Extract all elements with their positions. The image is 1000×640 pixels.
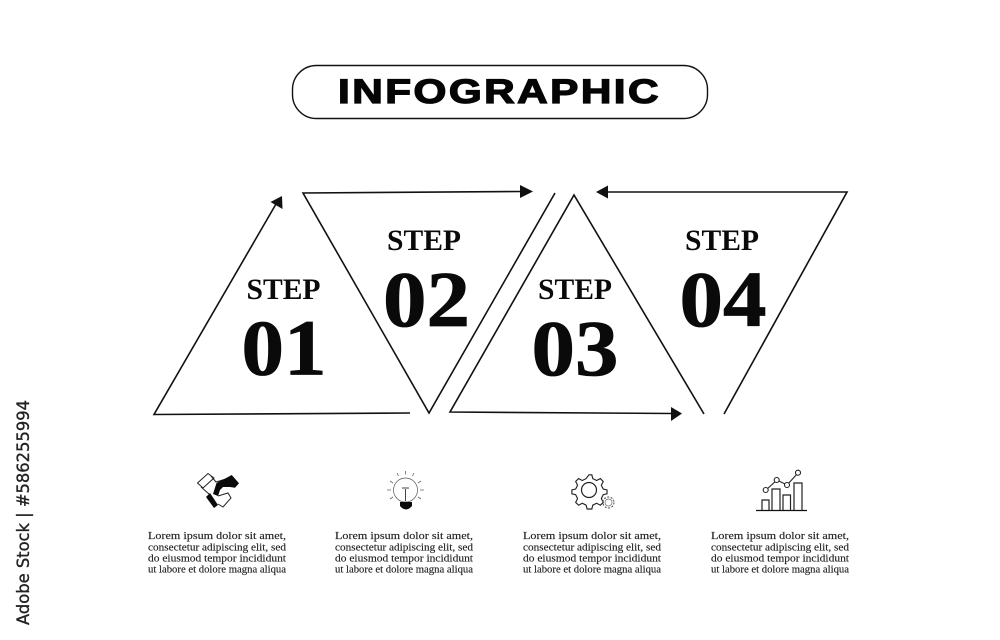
text block 4: ut labore et dolore magna aliqua xyxy=(711,564,849,576)
text block 4: do eiusmod tempor incididunt xyxy=(711,552,849,564)
stock id vertical text: Adobe Stock | #586255994 xyxy=(14,400,34,625)
icon: bar chart xyxy=(756,470,807,510)
step 01 label: STEP xyxy=(246,273,320,306)
step 04 label: STEP xyxy=(685,224,759,257)
step 03 triangle arrow xyxy=(450,195,704,421)
title text: INFOGRAPHIC xyxy=(338,73,661,111)
step 02 label: STEP xyxy=(387,224,461,257)
text block 4 xyxy=(711,530,850,576)
text block 2: do eiusmod tempor incididunt xyxy=(335,552,473,564)
text block 3: do eiusmod tempor incididunt xyxy=(523,552,661,564)
text block 2 xyxy=(335,530,474,576)
step 02 label: 02 xyxy=(383,257,470,344)
step 01 label: 01 xyxy=(242,306,326,392)
step 02 triangle arrow xyxy=(303,185,555,413)
step 04 triangle arrow xyxy=(596,186,847,414)
text block 3 xyxy=(523,530,662,576)
text block 1: ut labore et dolore magna aliqua xyxy=(148,564,286,576)
text block 3: consectetur adipiscing elit, sed xyxy=(523,542,662,554)
step 03 label: STEP xyxy=(538,273,612,306)
step 03 label xyxy=(532,273,618,393)
step 01 triangle arrow xyxy=(154,196,410,414)
icon: handshake xyxy=(198,474,239,508)
text block 2: Lorem ipsum dolor sit amet, xyxy=(335,530,473,542)
icon: gears xyxy=(572,475,614,509)
title pill xyxy=(292,66,708,118)
step 01 label xyxy=(242,273,326,392)
step 04 label: 04 xyxy=(680,257,766,344)
text block 2: consectetur adipiscing elit, sed xyxy=(335,542,474,554)
text block 1 xyxy=(148,530,287,576)
step 03 label: 03 xyxy=(532,306,618,393)
text block 2: ut labore et dolore magna aliqua xyxy=(335,564,473,576)
text block 1: Lorem ipsum dolor sit amet, xyxy=(148,530,286,542)
step 04 label xyxy=(680,224,766,344)
step 02 label xyxy=(383,224,470,344)
text block 1: do eiusmod tempor incididunt xyxy=(148,552,286,564)
text block 4: Lorem ipsum dolor sit amet, xyxy=(711,530,849,542)
text block 4: consectetur adipiscing elit, sed xyxy=(711,542,850,554)
text block 3: ut labore et dolore magna aliqua xyxy=(523,564,661,576)
text block 3: Lorem ipsum dolor sit amet, xyxy=(523,530,661,542)
text block 1: consectetur adipiscing elit, sed xyxy=(148,542,287,554)
icon: light bulb xyxy=(387,471,424,510)
